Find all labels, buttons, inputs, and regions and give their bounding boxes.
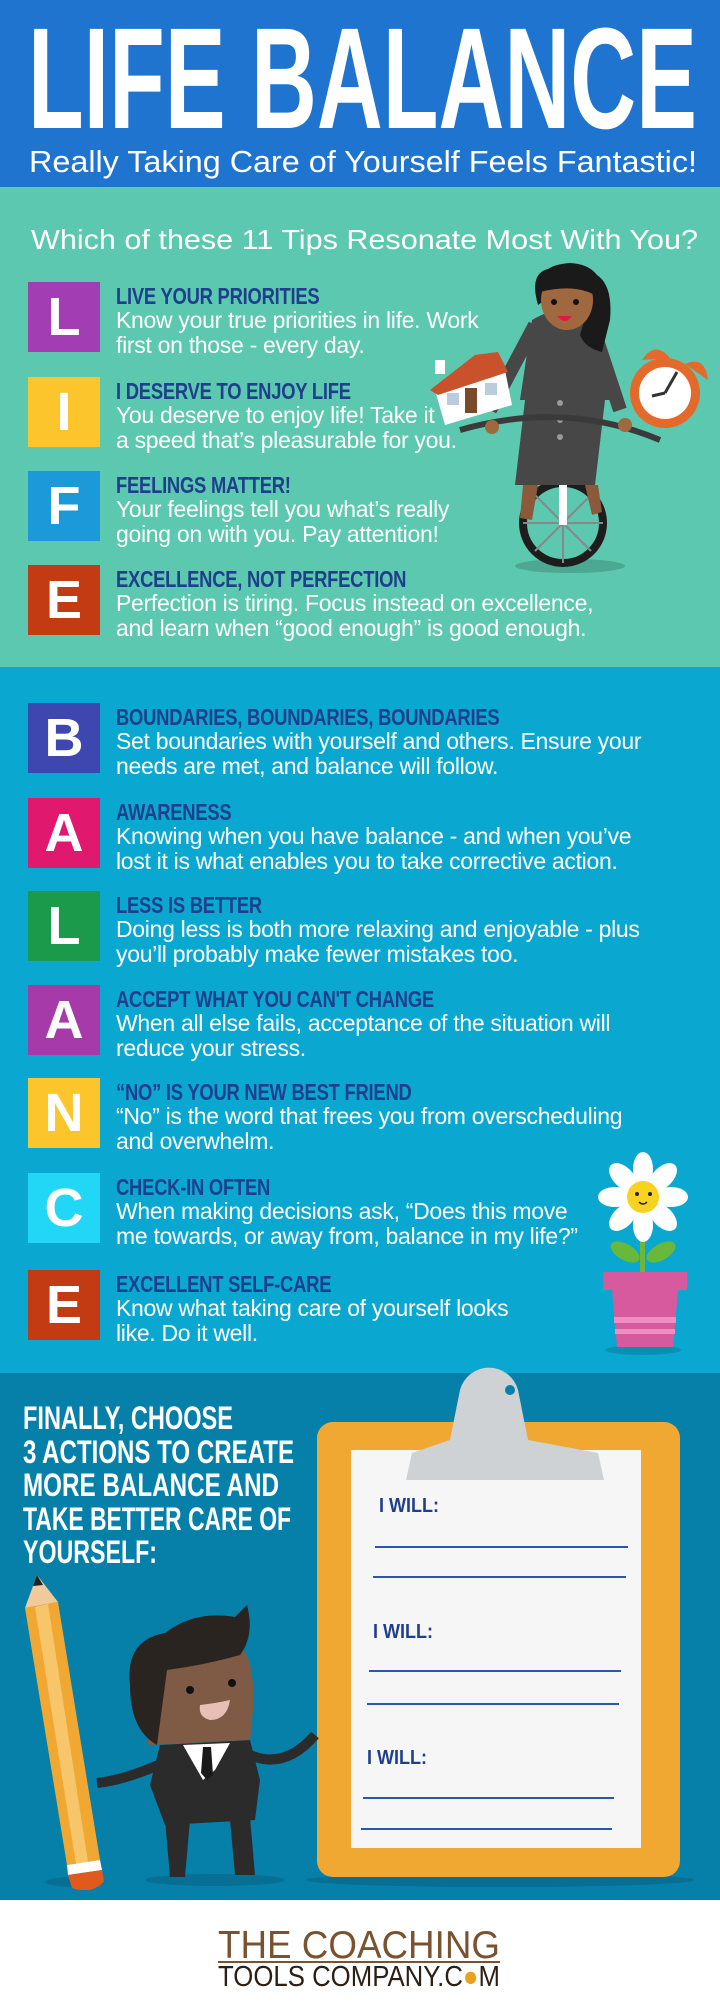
tip: accept: ACCEPT WHAT YOU CAN'T CHANGE	[116, 986, 434, 1012]
tip: accept	[116, 986, 610, 1061]
icon: flower pot	[598, 1152, 688, 1355]
tip: awareness	[116, 799, 631, 874]
tip: deserve: You deserve to enjoy life! Take it	[116, 402, 434, 428]
tip: self-care: Know what taking care of yourself looks	[116, 1295, 508, 1321]
footer logo: THE COACHING	[218, 1924, 500, 1967]
header banner	[0, 0, 720, 187]
illustration: businessman	[96, 1605, 319, 1886]
letter I	[28, 377, 100, 447]
tip: feelings	[116, 472, 450, 547]
tip: less is better: Doing less is both more relaxing and enjoyable - plus	[116, 916, 640, 942]
panel: BALANCE tips	[0, 667, 720, 1373]
question heading: Which of these 11 Tips Resonate Most With You?	[31, 224, 698, 255]
letter B: B	[44, 708, 84, 768]
tip: excellence	[116, 566, 593, 641]
letter N	[28, 1078, 100, 1148]
letter E: E	[46, 1275, 82, 1335]
tip: no: “NO” IS YOUR NEW BEST FRIEND	[116, 1079, 412, 1105]
tip: deserve: a speed that’s pleasurable for you.	[116, 427, 457, 453]
tip: awareness: AWARENESS	[116, 799, 231, 825]
tip: accept: When all else fails, acceptance of the situation will	[116, 1010, 610, 1036]
letter E: E	[46, 570, 82, 630]
tip: no: and overwhelm.	[116, 1128, 274, 1154]
letter E	[28, 565, 100, 635]
letter E	[28, 1270, 100, 1340]
footer logo	[218, 1924, 500, 1993]
tip: less is better: LESS IS BETTER	[116, 892, 262, 918]
heading: finally choose: YOURSELF:	[23, 1534, 157, 1570]
tip: excellence: and learn when “good enough” is good enough.	[116, 615, 586, 641]
tip: less is better: you’ll probably make fewer mistakes too.	[116, 941, 518, 967]
letter A: A	[44, 990, 84, 1050]
letter B	[28, 703, 100, 773]
panel: final actions	[0, 1373, 720, 1900]
clipboard: I WILL:	[367, 1747, 427, 1769]
letter A	[28, 985, 100, 1055]
tip: accept: reduce your stress.	[116, 1035, 306, 1061]
letter C	[28, 1173, 100, 1243]
tip: boundaries: BOUNDARIES, BOUNDARIES, BOUNDARIES	[116, 704, 499, 730]
tip: self-care	[116, 1271, 508, 1346]
illustration: pencil	[25, 1575, 105, 1890]
tip: self-care: EXCELLENT SELF-CARE	[116, 1271, 331, 1297]
tip: excellence: Perfection is tiring. Focus instead on excellence,	[116, 590, 593, 616]
clipboard	[305, 1368, 695, 1887]
tip: self-care: like. Do it well.	[116, 1320, 258, 1346]
tip: deserve	[116, 378, 457, 453]
tip: live your priorities: LIVE YOUR PRIORITIES	[116, 283, 319, 309]
letter A	[28, 798, 100, 868]
heading: finally choose	[23, 1400, 294, 1570]
tip: live your priorities: first on those - every day.	[116, 332, 364, 358]
tip: awareness: lost it is what enables you to take corrective action.	[116, 848, 618, 874]
tip: check-in: me towards, or away from, balance in my life?”	[116, 1223, 578, 1249]
tip: feelings: Your feelings tell you what’s really	[116, 496, 449, 522]
footer logo: TOOLS COMPANY.C●M	[218, 1961, 500, 1993]
tip: less is better	[116, 892, 640, 967]
illustration: woman on unicycle	[430, 263, 708, 573]
tip: live your priorities: Know your true priorities in life. Work	[116, 307, 478, 333]
subtitle: Really Taking Care of Yourself Feels Fantastic!	[29, 144, 697, 179]
letter I: I	[56, 382, 72, 442]
tip: check-in: CHECK-IN OFTEN	[116, 1174, 270, 1200]
tip: excellence: EXCELLENCE, NOT PERFECTION	[116, 566, 406, 592]
tip: deserve: I DESERVE TO ENJOY LIFE	[116, 378, 351, 404]
tip: boundaries: needs are met, and balance will follow.	[116, 753, 498, 779]
letter C: C	[44, 1178, 84, 1238]
letter N: N	[44, 1083, 84, 1143]
letter L: L	[48, 896, 80, 956]
letter F: F	[48, 476, 80, 536]
tip: no: “No” is the word that frees you from overscheduling	[116, 1103, 622, 1129]
tip: boundaries: Set boundaries with yourself and others. Ensure your	[116, 728, 641, 754]
letter A: A	[44, 803, 84, 863]
letter F	[28, 471, 100, 541]
tip: boundaries	[116, 704, 642, 779]
letter L	[28, 891, 100, 961]
tip: feelings: going on with you. Pay attention!	[116, 521, 439, 547]
tip: live your priorities	[116, 283, 479, 358]
tip: feelings: FEELINGS MATTER!	[116, 472, 291, 498]
tip: no	[116, 1079, 622, 1154]
clipboard: I WILL:	[373, 1621, 433, 1643]
tip: awareness: Knowing when you have balance - and when you’ve	[116, 823, 631, 849]
tip: check-in: When making decisions ask, “Does this move	[116, 1198, 567, 1224]
clipboard: I WILL:	[379, 1495, 439, 1517]
panel: LIFE tips	[0, 187, 720, 667]
heading: finally choose: FINALLY, CHOOSE	[23, 1400, 233, 1436]
letter L: L	[48, 287, 80, 347]
letter L	[28, 282, 100, 352]
tip: check-in	[116, 1174, 578, 1249]
